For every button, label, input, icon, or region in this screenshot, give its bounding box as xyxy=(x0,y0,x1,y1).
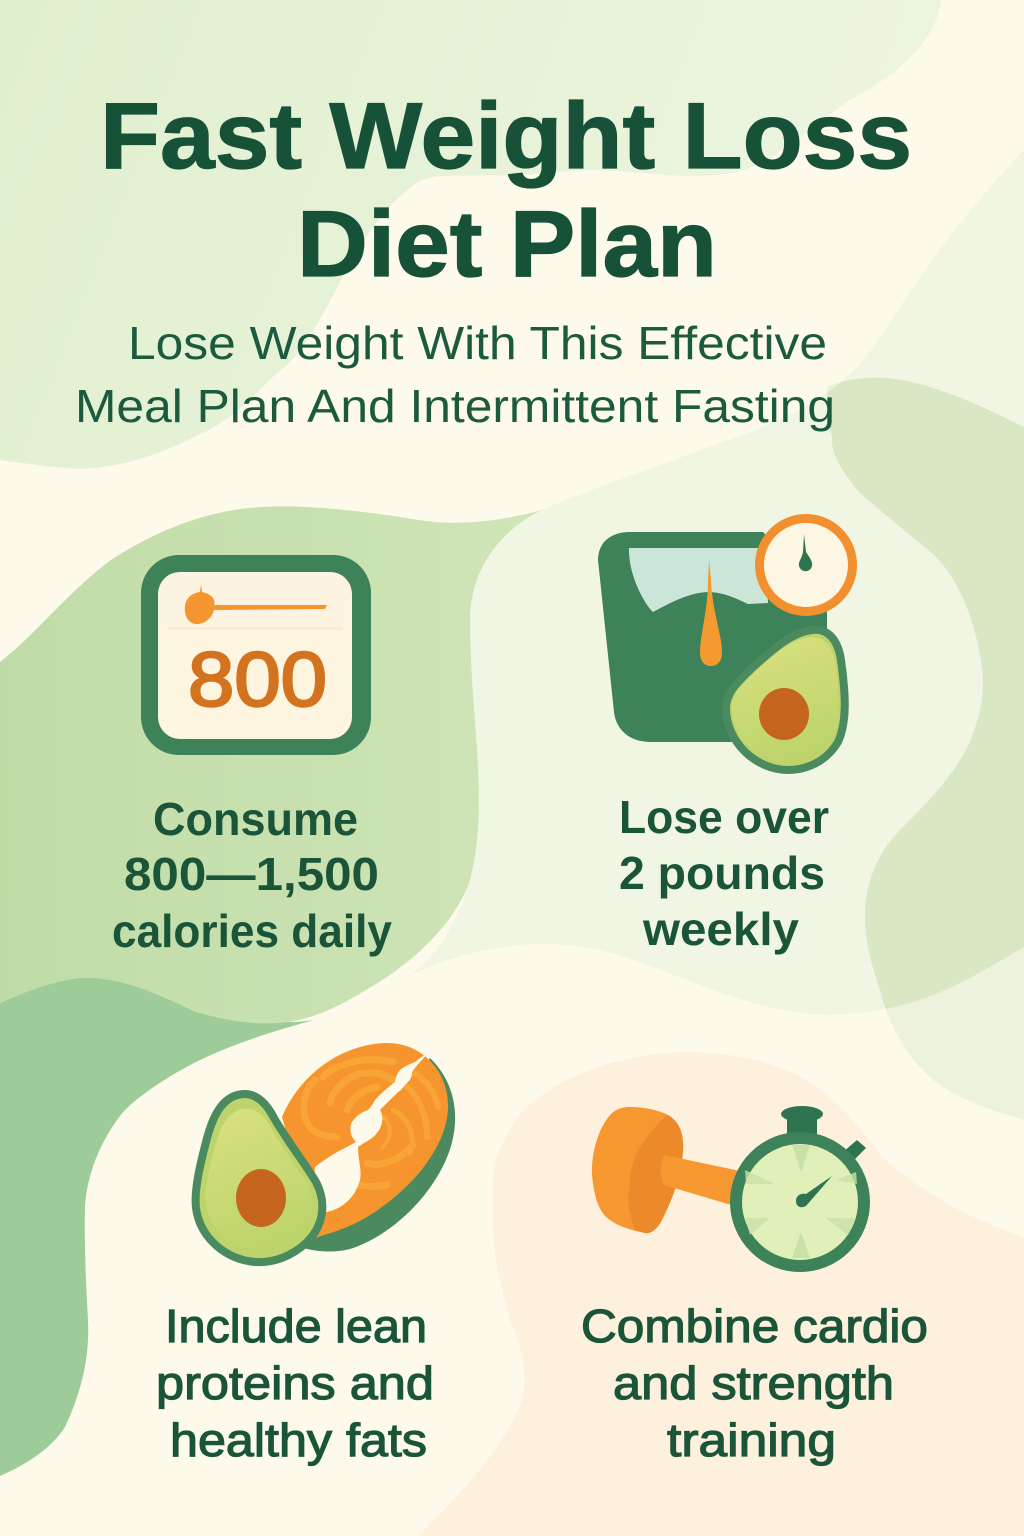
icon: scale with clock and avocado xyxy=(598,518,852,770)
label: lose over 2 pounds xyxy=(619,791,829,955)
label: consume calories: 800—1,500 xyxy=(124,848,379,900)
label: lean proteins and healthy fats: Include lean xyxy=(165,1300,427,1352)
label: cardio and strength training: training xyxy=(667,1414,836,1466)
panel: calories xyxy=(112,555,392,957)
label: lean proteins and healthy fats: proteins and xyxy=(156,1357,434,1409)
label: cardio and strength training: Combine cardio xyxy=(581,1300,928,1352)
icon: dumbbell and stopwatch xyxy=(592,1106,866,1266)
subtitle xyxy=(75,317,835,432)
panel: weight loss xyxy=(598,518,852,955)
icon: salmon and avocado xyxy=(196,1043,455,1262)
panel: foods xyxy=(156,1043,455,1466)
label: lose over 2 pounds: 2 pounds xyxy=(619,847,825,899)
label: lose over 2 pounds: weekly xyxy=(642,903,799,955)
label: consume calories xyxy=(112,793,392,957)
subtitle: Lose Weight With This Effective xyxy=(128,317,827,369)
label: lose over 2 pounds: Lose over xyxy=(619,791,829,843)
label: cardio and strength training: and strength xyxy=(613,1357,894,1409)
icon: calorie counter: 800 xyxy=(188,637,327,723)
icon: calorie counter xyxy=(141,555,371,755)
label: cardio and strength training xyxy=(581,1300,928,1466)
label: consume calories: Consume xyxy=(153,793,358,845)
title: Diet Plan xyxy=(297,191,717,296)
label: consume calories: calories daily xyxy=(112,905,392,957)
subtitle: Meal Plan And Intermittent Fasting xyxy=(75,380,835,432)
label: lean proteins and healthy fats xyxy=(156,1300,434,1466)
label: lean proteins and healthy fats: healthy fats xyxy=(170,1414,427,1466)
panel: exercise xyxy=(581,1106,928,1466)
title: Fast Weight Loss xyxy=(100,83,912,188)
title xyxy=(100,83,912,296)
